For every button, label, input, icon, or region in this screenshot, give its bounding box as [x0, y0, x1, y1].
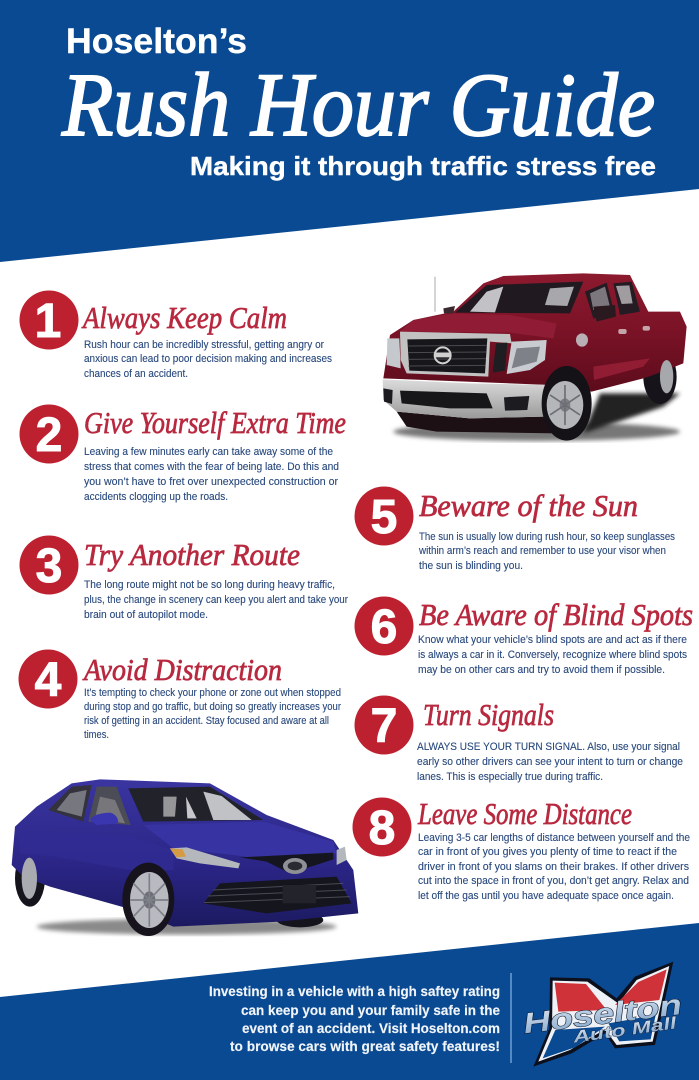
tip 8 body: [418, 832, 690, 902]
tip 1 body: chances of an accident.: [84, 368, 188, 380]
blue sedan illustration: [12, 779, 358, 936]
tip 5 heading: Beware of the Sun: [419, 488, 638, 523]
tip 1 body: Rush hour can be incredibly stressful, getting angry or: [84, 339, 324, 351]
tip 8 body: let off the gas until you have adequate space once again.: [418, 890, 674, 902]
footer call-to-action text: to browse cars with great safety features!: [230, 1039, 500, 1054]
number badge 7: 7: [371, 700, 397, 753]
tip 3 body: The long route might not be so long during heavy traffic,: [84, 579, 335, 591]
number badge 6: 6: [371, 601, 397, 654]
tip 1 body: anxious can lead to poor decision making and increases: [84, 353, 332, 365]
tip 5 body: [418, 531, 675, 572]
number badge 1: [20, 290, 78, 350]
tip 4: avoid distraction: [18, 650, 341, 741]
tip 2 body: you won’t have to fret over unexpected construction or: [84, 476, 338, 488]
tip 2 body: [84, 446, 339, 503]
footer call-to-action text: can keep you and your family safe in the: [241, 1003, 500, 1018]
footer banner: [0, 923, 699, 1080]
tip 2 body: Leaving a few minutes early can take away some of the: [84, 446, 333, 458]
brand heading: Hoselton’s: [66, 22, 247, 61]
tip 2 body: stress that comes with the fear of being late. Do this and: [84, 461, 339, 473]
tip 5 body: the sun is blinding you.: [419, 560, 523, 572]
main script title: Rush Hour Guide: [61, 56, 655, 155]
number badge 2: [20, 404, 78, 464]
number badge 8: [352, 798, 412, 856]
tip 4 body: times.: [84, 729, 109, 741]
tip 4 body: It’s tempting to check your phone or zone out when stopped: [84, 687, 341, 699]
tip 3 body: plus, the change in scenery can keep you alert and take your: [84, 594, 348, 606]
tip 1 body: [84, 339, 332, 380]
number badge 2: 2: [36, 409, 62, 462]
red pickup truck illustration: [383, 273, 687, 441]
number badge 1: 1: [35, 295, 61, 348]
tip 7: turn signals: [354, 696, 683, 783]
footer call-to-action text: event of an accident. Visit Hoselton.com: [242, 1021, 500, 1036]
tip 4 body: risk of getting in an accident. Stay focused and aware at all: [84, 715, 329, 727]
tip 6: be aware of blind spots: [354, 596, 693, 676]
number badge 5: 5: [371, 491, 397, 544]
tip 3 body: [84, 579, 348, 621]
number badge 4: 4: [35, 654, 62, 707]
tip 5: beware of the sun: [354, 486, 675, 572]
tip 5 body: within arm’s reach and remember to use your visor when: [418, 545, 666, 557]
number badge 6: [354, 596, 414, 656]
Hoselton Auto Mall logo: [522, 962, 684, 1067]
tip 7 body: [417, 741, 683, 783]
number badge 7: [354, 696, 414, 754]
tip 3 body: brain out of autopilot mode.: [84, 609, 208, 621]
number badge 5: [354, 486, 414, 546]
tip 7 body: lanes. This is especially true during traffic.: [417, 771, 603, 783]
tip 3: try another route: [20, 536, 348, 621]
number badge 8: 8: [369, 802, 395, 855]
number badge 3: [20, 536, 78, 594]
tip 2 heading: Give Yourself Extra Time: [84, 405, 346, 440]
number badge 4: [18, 650, 78, 708]
tip 8 heading: Leave Some Distance: [417, 796, 632, 831]
tip 4 body: [84, 687, 341, 741]
tip 3 heading: Try Another Route: [84, 537, 300, 572]
tip 7 heading: Turn Signals: [423, 697, 554, 732]
footer call-to-action text: [209, 984, 500, 1054]
tip 4 heading: Avoid Distraction: [82, 652, 282, 687]
subtitle: Making it through traffic stress free: [190, 151, 656, 181]
header banner: [0, 0, 699, 262]
header titles: [61, 22, 656, 181]
tip 1: always keep calm: [20, 290, 332, 380]
Hoselton Auto Mall logo: Auto Mall: [571, 1013, 678, 1047]
tip 8: leave some distance: [352, 796, 690, 902]
tip 4 body: during stop and go traffic, but doing so greatly increases your: [84, 701, 341, 713]
tip 2 body: accidents clogging up the roads.: [84, 491, 228, 503]
tip 6 body: [418, 634, 687, 676]
footer call-to-action text: Investing in a vehicle with a high saftey rating: [209, 984, 500, 999]
tip 1 heading: Always Keep Calm: [81, 300, 287, 335]
tip 2: give yourself extra time: [20, 404, 346, 503]
Hoselton Auto Mall logo: Hoselton: [522, 989, 684, 1040]
number badge 3: 3: [36, 540, 62, 593]
tip 8 body: driver in front of you slams on their brakes. If other drivers: [418, 861, 689, 873]
tip 6 body: may be on other cars and try to avoid them if possible.: [418, 664, 665, 676]
tip 8 body: car in front of you gives you plenty of time to react if the: [418, 846, 677, 858]
